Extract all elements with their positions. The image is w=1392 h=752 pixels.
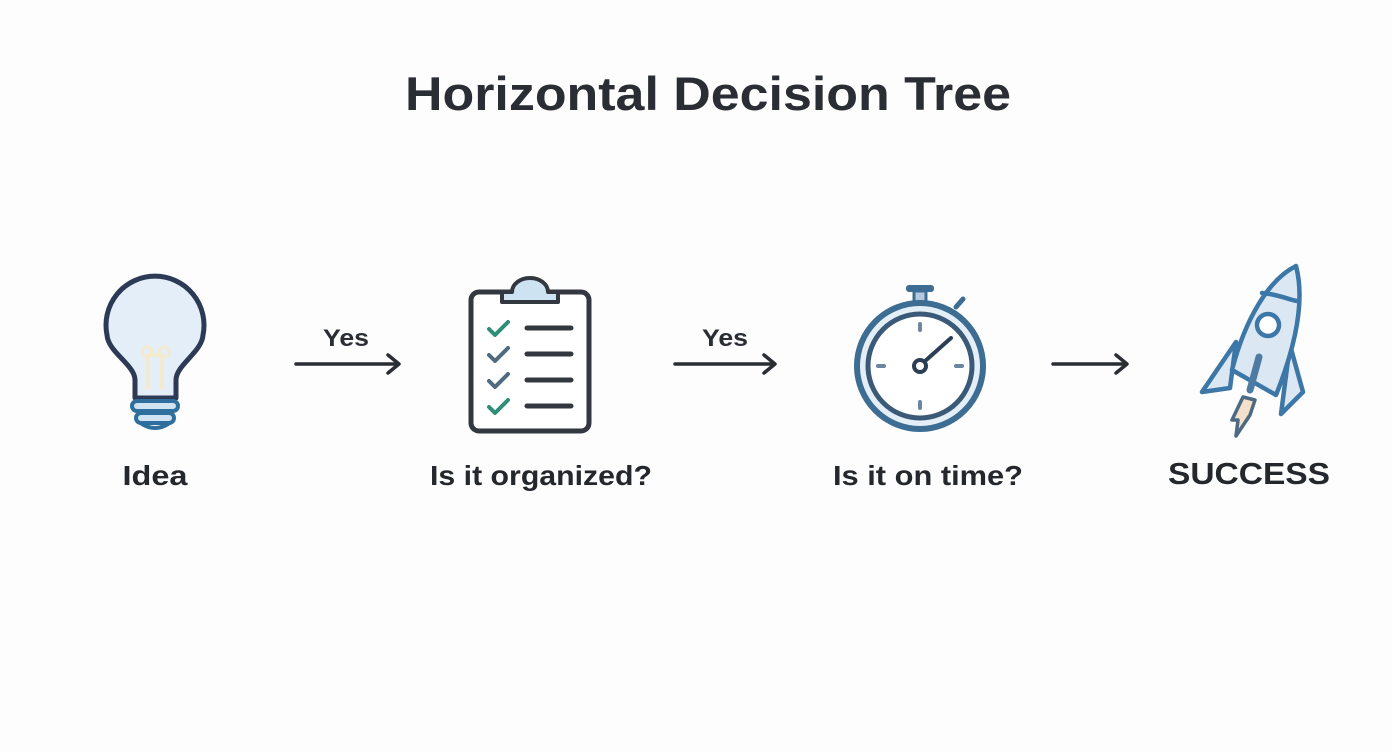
icon: rocket [1202,266,1303,436]
arrow 1 with Yes: Yes [323,325,369,352]
label: Is it organized?: Is it organized? [430,460,652,491]
label: Idea: Idea [122,460,188,491]
arrow 1 with Yes [296,325,399,373]
icon: clipboard checklist [471,278,589,431]
label: SUCCESS: SUCCESS [1168,456,1330,491]
arrow 3 [1053,355,1127,373]
icon: stopwatch [857,285,983,429]
title: Horizontal Decision Tree [405,67,1011,120]
arrow 2 with Yes: Yes [702,325,748,352]
icon: light bulb [106,276,204,428]
arrow 2 with Yes [675,325,775,373]
label: Is it on time?: Is it on time? [833,460,1023,491]
